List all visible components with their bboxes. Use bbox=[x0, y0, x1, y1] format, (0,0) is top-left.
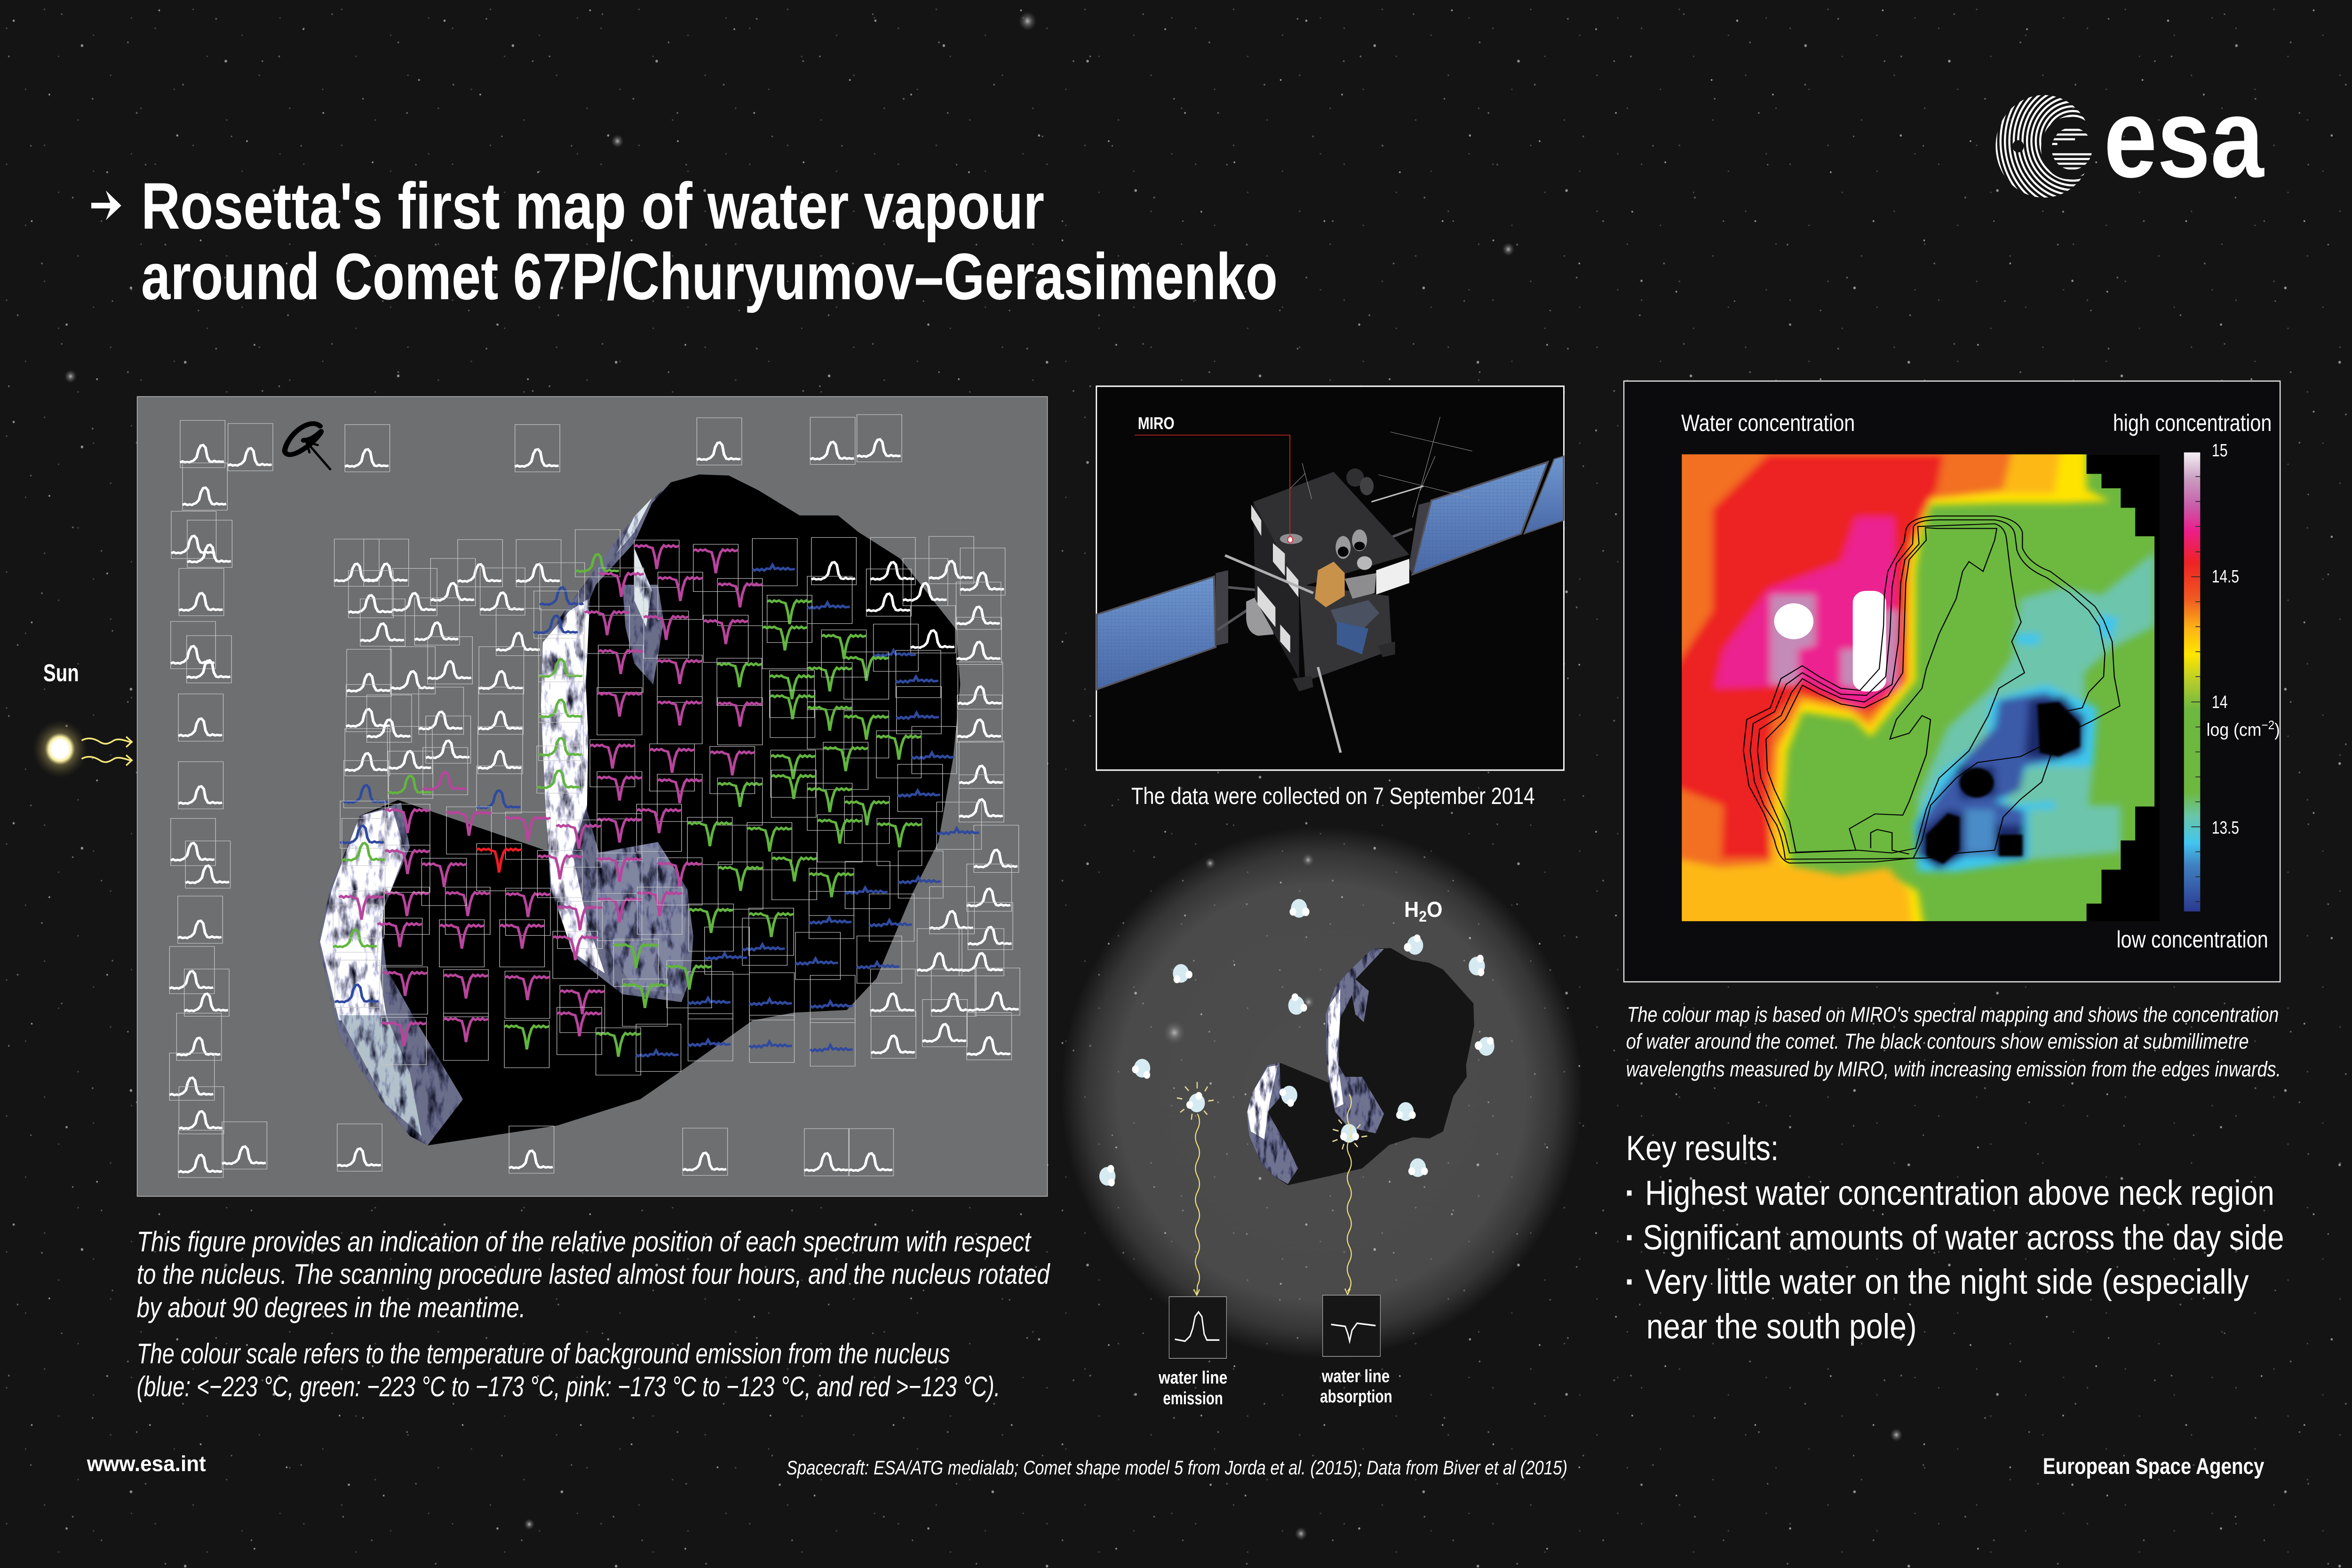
key results: · bbox=[1625, 1174, 1636, 1213]
figure caption: by about 90 degrees in the meantime. bbox=[137, 1292, 526, 1323]
emission spectrum box bbox=[1169, 1297, 1226, 1358]
callout line to MIRO bbox=[1135, 435, 1290, 537]
key results: Significant amounts of water across the day side bbox=[1643, 1218, 2284, 1258]
spectra: white bbox=[169, 414, 1020, 1178]
water molecules bbox=[1099, 899, 1494, 1186]
sunlit surface of the comet bbox=[318, 482, 693, 1146]
wavy emission arrow bbox=[1194, 1114, 1200, 1295]
footer: agency: European Space Agency bbox=[2043, 1454, 2265, 1479]
water line emission label bbox=[1158, 1368, 1227, 1408]
map masked corners bbox=[2087, 454, 2160, 921]
figure caption: This figure provides an indication of the relative position of each spectrum with respect bbox=[137, 1226, 1032, 1258]
absorption spectrum box bbox=[1323, 1295, 1380, 1356]
icon: sunlight wave arrows bbox=[81, 737, 132, 765]
figure caption: (blue: <−223 °C, green: −223 °C to −173 °C, pink: −173 °C to −123 °C, and red >−123 °C). bbox=[137, 1371, 1000, 1402]
spectrum: red bbox=[477, 844, 522, 891]
icon: sun bbox=[32, 720, 87, 778]
key results: Key results: bbox=[1626, 1129, 1779, 1168]
map low-value holes bbox=[1926, 702, 2080, 864]
water line emission label: emission bbox=[1163, 1388, 1223, 1408]
panel: spacecraft illustration bbox=[1097, 386, 1564, 770]
H2O label: O bbox=[1427, 898, 1443, 922]
wavy absorption arrow bbox=[1345, 1094, 1351, 1294]
panel: water concentration map bbox=[1624, 381, 2280, 982]
footer: website: www.esa.int bbox=[87, 1452, 206, 1476]
H2O label: H bbox=[1404, 898, 1419, 922]
title: Rosetta's first map of water vapour bbox=[141, 169, 1044, 243]
spacecraft body bbox=[1246, 595, 1274, 636]
spectra: pink bbox=[339, 540, 763, 1065]
key results: Very little water on the night side (especially bbox=[1645, 1263, 2249, 1302]
map labels: ) bbox=[2274, 720, 2280, 740]
figure caption: The colour scale refers to the temperature of background emission from the nucleus bbox=[137, 1338, 950, 1369]
solar arrays bbox=[1413, 462, 1548, 574]
key results bbox=[1625, 1129, 2284, 1346]
submillimetre contours bbox=[1743, 516, 2120, 863]
map labels: Water concentration bbox=[1681, 410, 1855, 436]
glow rays bbox=[1177, 1082, 1367, 1149]
title: around Comet 67P/Churyumov–Gerasimenko bbox=[141, 239, 1278, 313]
spectra: blue bbox=[335, 539, 982, 1071]
map labels: 14 bbox=[2212, 692, 2228, 712]
MIRO label: MIRO bbox=[1138, 414, 1175, 433]
key results: near the south pole) bbox=[1646, 1307, 1917, 1346]
ESA logo bbox=[1995, 95, 2265, 198]
map labels: low concentration bbox=[2116, 927, 2268, 953]
map caption: The colour map is based on MIRO's spectral mapping and shows the concentration bbox=[1627, 1003, 2279, 1027]
sun label: Sun bbox=[43, 659, 79, 686]
map labels: 15 bbox=[2212, 440, 2228, 460]
panel: spectra over the comet nucleus bbox=[137, 397, 1048, 1196]
spectra: green bbox=[333, 530, 922, 1075]
map labels: log (cm bbox=[2207, 720, 2261, 740]
water line emission label: water line bbox=[1158, 1368, 1227, 1387]
title arrow bbox=[91, 191, 121, 220]
comet nucleus silhouette bbox=[318, 475, 960, 1146]
title bbox=[141, 169, 1278, 313]
key results: Highest water concentration above neck region bbox=[1645, 1174, 2274, 1213]
icon: rotation direction arrow bbox=[285, 423, 330, 469]
figure caption bbox=[137, 1226, 1050, 1402]
instruments bbox=[1346, 469, 1364, 487]
ESA logo: esa bbox=[2104, 75, 2265, 201]
water line absorption label bbox=[1320, 1366, 1392, 1406]
map labels: high concentration bbox=[2113, 410, 2272, 436]
footer: credits: Spacecraft: ESA/ATG medialab; Comet shape model 5 from Jorda et al. (2015); Data from Biver et al (2015) bbox=[787, 1457, 1567, 1479]
panel: water emission and absorption diagram bbox=[1061, 826, 1583, 1408]
key results: · bbox=[1625, 1218, 1636, 1258]
colour bar bbox=[2184, 453, 2200, 911]
map labels: 13.5 bbox=[2212, 818, 2239, 837]
figure caption: to the nucleus. The scanning procedure lasted almost four hours, and the nucleus rotated bbox=[137, 1258, 1050, 1290]
map caption: wavelengths measured by MIRO, with increasing emission from the edges inwards. bbox=[1626, 1058, 2281, 1081]
map labels: −2 bbox=[2261, 718, 2274, 732]
map labels bbox=[1681, 410, 2280, 953]
gas coma halo bbox=[1061, 826, 1583, 1359]
H2O label: 2 bbox=[1419, 908, 1427, 925]
small comet bbox=[1247, 948, 1474, 1185]
colour map bbox=[1682, 454, 2160, 921]
spacecraft caption: The data were collected on 7 September 2014 bbox=[1131, 783, 1535, 809]
water line absorption label: absorption bbox=[1320, 1386, 1392, 1406]
water line absorption label: water line bbox=[1321, 1366, 1390, 1386]
map labels: 14.5 bbox=[2212, 566, 2239, 586]
map caption bbox=[1626, 1003, 2281, 1081]
map high-value peaks bbox=[1774, 591, 1886, 692]
key results: · bbox=[1625, 1263, 1636, 1302]
map caption: of water around the comet. The black contours show emission at submillimetre bbox=[1626, 1030, 2249, 1053]
